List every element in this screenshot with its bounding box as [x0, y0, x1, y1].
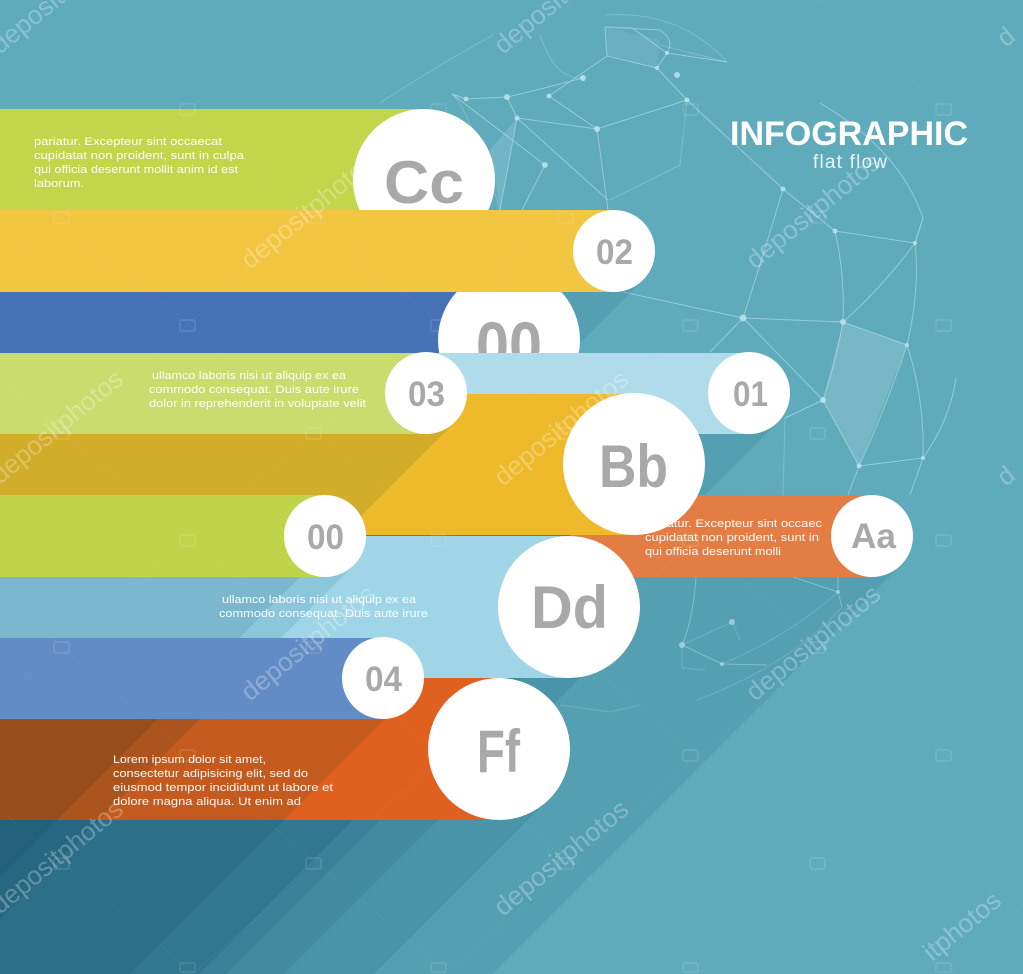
title: INFOGRAPHIC: [730, 115, 968, 153]
light blue bar 01: [420, 352, 790, 434]
orange bar Aa: Aa: [851, 517, 897, 556]
text block: green bar: [34, 136, 245, 190]
text block: sky blue bar: [219, 594, 428, 620]
light green bar 03: [0, 352, 467, 434]
orange bar Aa: [570, 495, 913, 577]
watermark text: depositphotos: [488, 794, 634, 922]
text block: sky blue bar: ullamco laboris nisi ut aliquip ex ea: [222, 594, 417, 606]
text block: orange bar: [645, 518, 823, 558]
text block: green bar: pariatur. Excepteur sint occaecat: [34, 136, 222, 148]
orange bar Ff: [0, 678, 570, 820]
text block: light green bar: dolor in reprehenderit in voluptate velit: [149, 398, 366, 410]
blue bar 00: [0, 269, 580, 411]
text block: orange bar: cupidatat non proident, sunt in: [645, 532, 819, 544]
sky blue bar Dd: [0, 536, 640, 678]
watermark text: depositphotos: [740, 579, 886, 707]
sky blue bar Dd: Dd: [531, 574, 608, 641]
watermark text: depositphotos: [235, 579, 381, 707]
golden bar Bb: [0, 393, 705, 535]
text block: orange bar Ff: Lorem ipsum dolor sit amet,: [113, 754, 266, 766]
text block: green bar: qui officia deserunt mollit anim id est: [34, 164, 238, 176]
light blue bar 01: 01: [733, 375, 768, 414]
shadow of bar 03: [0, 353, 455, 877]
watermark text: depositphotos: [488, 364, 634, 492]
watermark text: d: [991, 21, 1021, 53]
blue bar 04: 04: [365, 660, 403, 699]
blue bar 00: 00: [476, 308, 542, 382]
text block: orange bar Ff: eiusmod tempor incididunt ut labore et: [113, 782, 333, 794]
shadow of bar 04: [0, 638, 412, 974]
yellow bar 02: [0, 210, 655, 292]
text block: sky blue bar: commodo consequat. Duis aute irure: [219, 608, 428, 620]
wireframe globe: [380, 15, 956, 712]
text block: green bar: laborum.: [34, 178, 84, 190]
green bar Cc: Cc: [384, 149, 464, 216]
text block: orange bar: pariatur. Excepteur sint occaec: [645, 518, 823, 530]
watermark camera marks: [54, 104, 951, 972]
long shadows on background: [0, 210, 901, 974]
green bar Cc: [0, 109, 495, 251]
lime bar 00: [0, 495, 366, 577]
subtitle: flat flow: [813, 152, 887, 173]
watermark text: depositphotos: [740, 147, 886, 275]
text block: orange bar: qui officia deserunt molli: [645, 546, 781, 558]
text block: orange bar Ff: dolore magna aliqua. Ut enim ad: [113, 796, 301, 808]
shadow of bar 00: [0, 495, 354, 919]
blue bar 04: [0, 637, 424, 719]
golden bar Bb: Bb: [599, 433, 668, 500]
text block: orange bar Ff: consectetur adipisicing elit, sed do: [113, 768, 308, 780]
lime bar 00: 00: [307, 518, 344, 557]
watermark text: depositphotos: [235, 147, 381, 275]
orange bar Ff: Ff: [477, 718, 521, 785]
watermark text: d: [991, 460, 1021, 492]
text block: green bar: cupidatat non proident, sunt in culpa: [34, 150, 245, 162]
light green bar 03: 03: [408, 375, 445, 414]
watermark text: itphotos: [917, 885, 1007, 967]
text block: light green bar: ullamco laboris nisi ut aliquip ex ea: [152, 370, 347, 382]
yellow bar 02: 02: [596, 233, 633, 272]
text block: orange bar Ff: [113, 754, 333, 808]
text block: light green bar: [149, 370, 366, 410]
text block: light green bar: commodo consequat. Duis aute irure: [149, 384, 359, 396]
